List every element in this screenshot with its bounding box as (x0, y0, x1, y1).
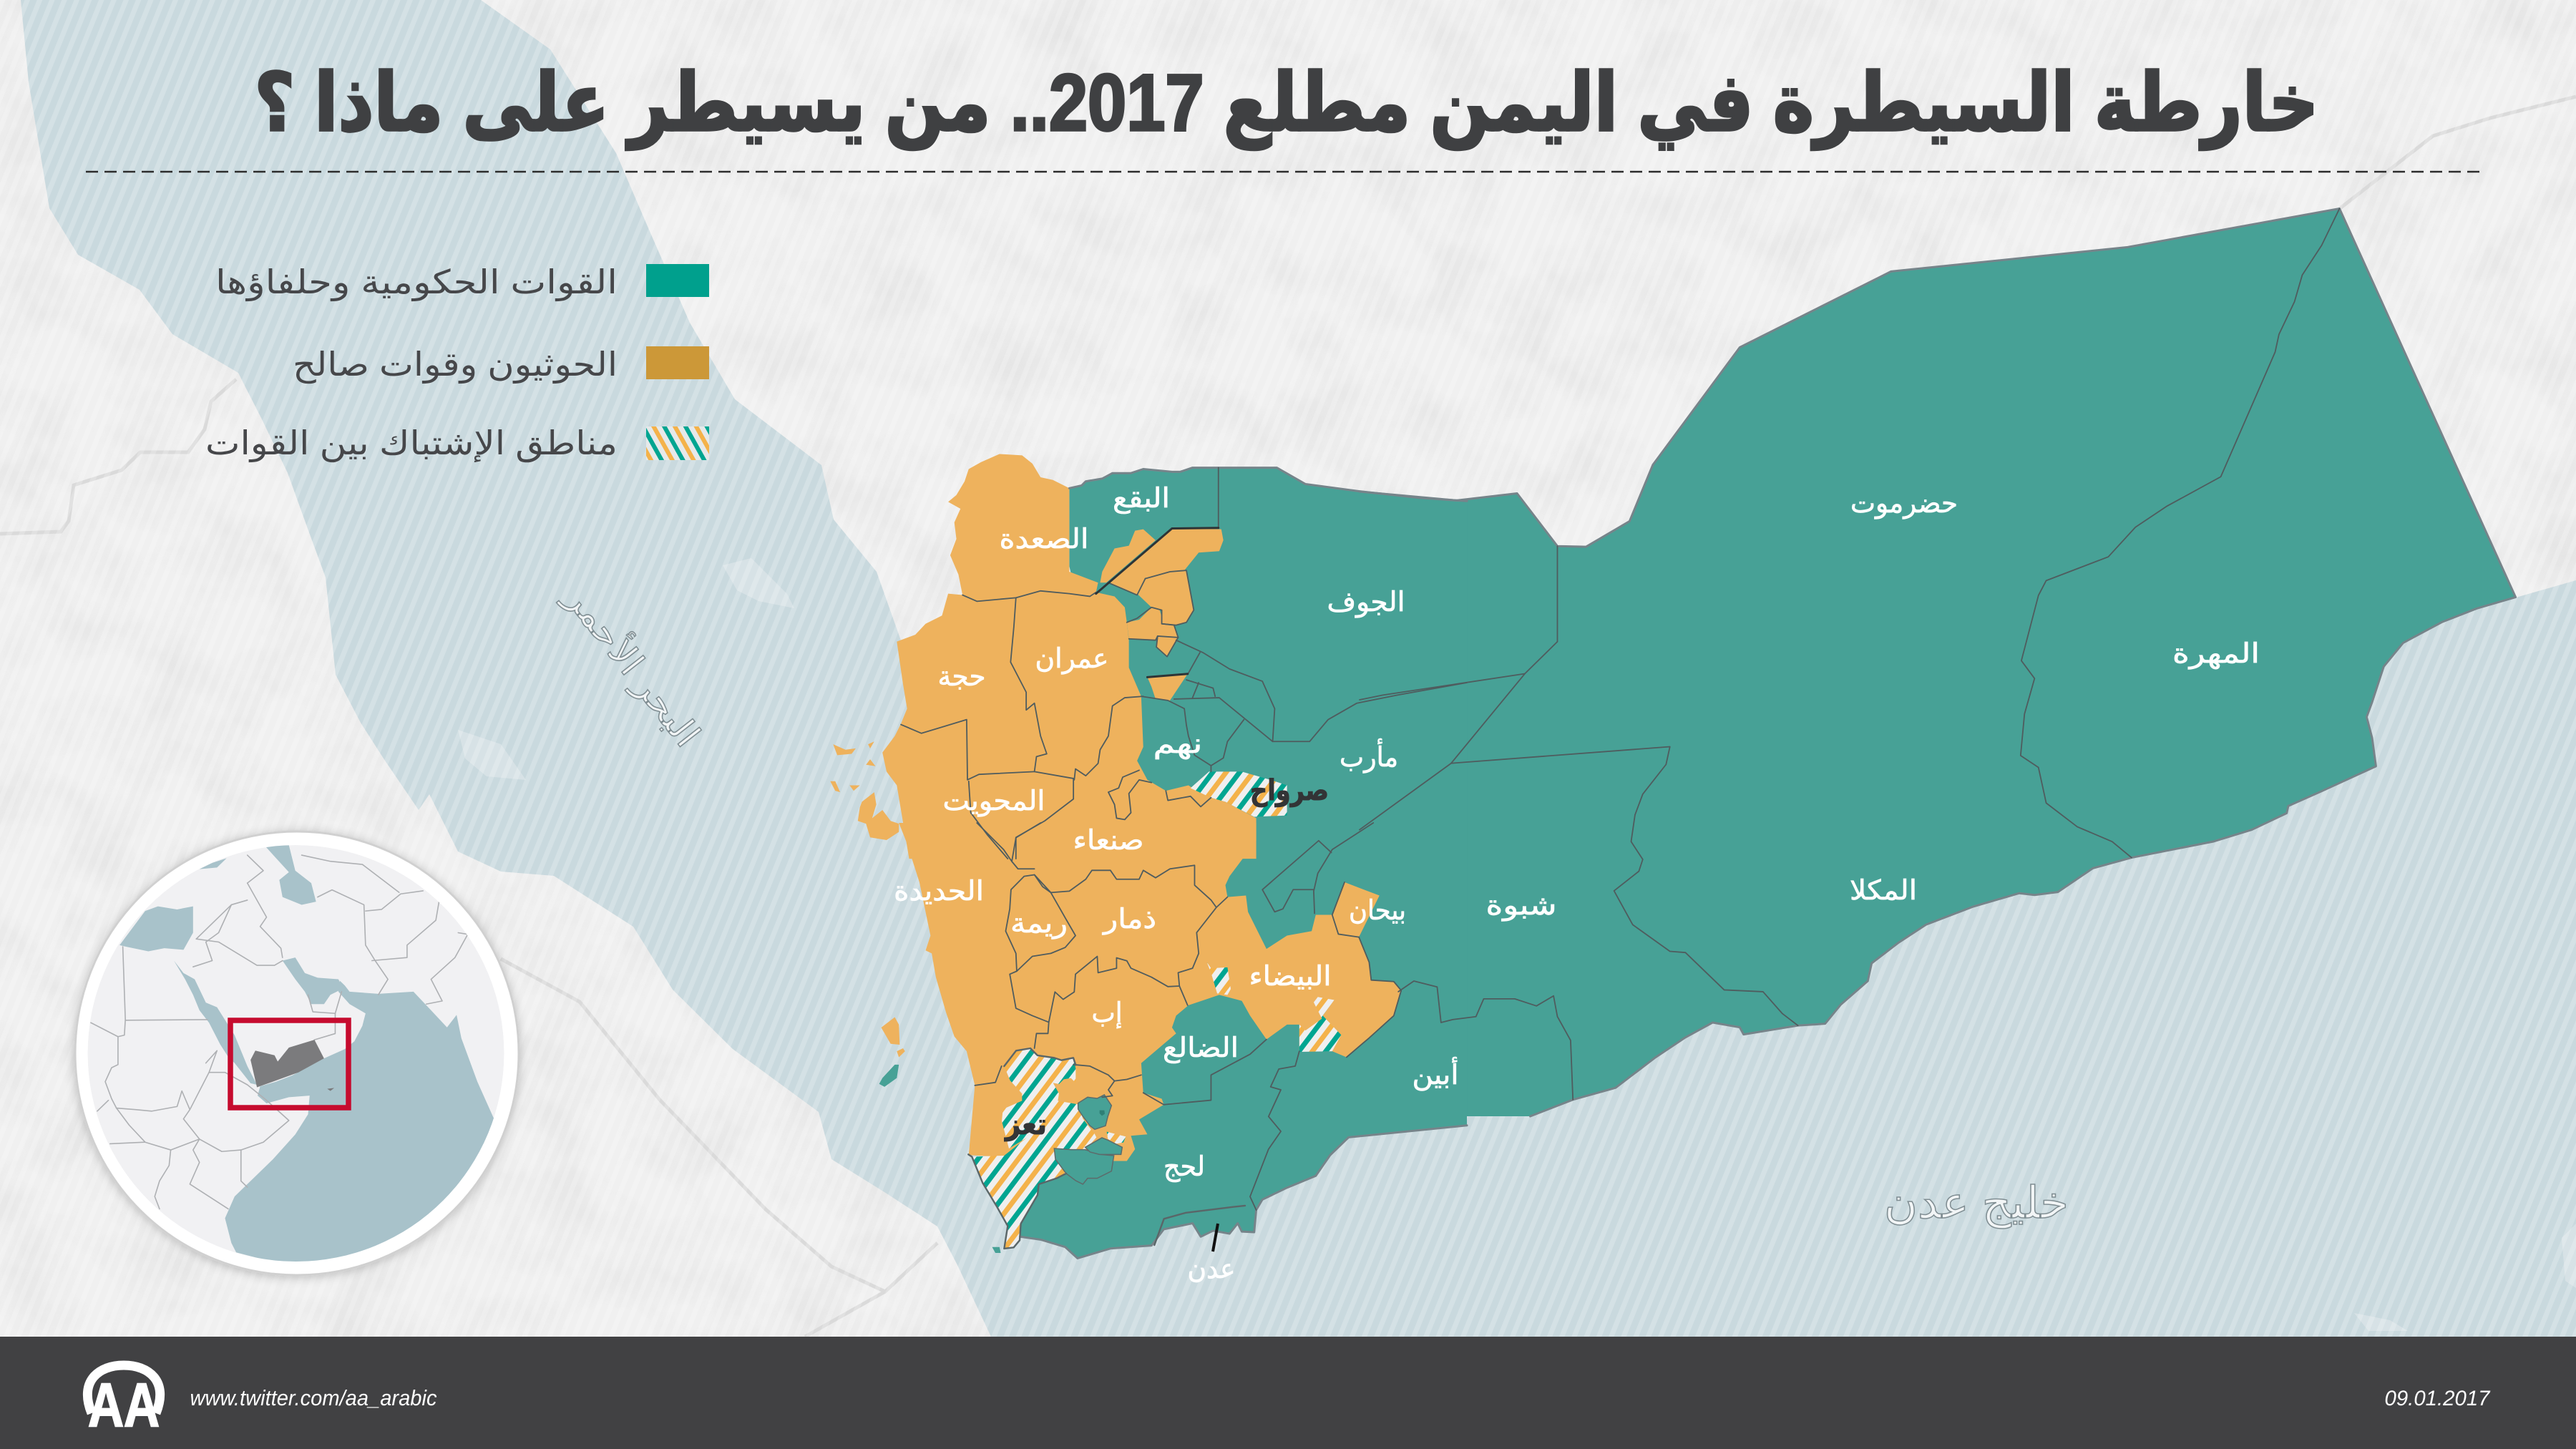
footer bar (0, 1337, 2576, 1449)
governorate labels: البيضاء (1249, 962, 1331, 992)
governorate labels: إب (1092, 998, 1122, 1029)
governorate labels: ريمة (1010, 909, 1068, 939)
footer: date: 09.01.2017 (2384, 1387, 2491, 1410)
governorate labels: الضالع (1163, 1033, 1239, 1064)
legend item: government forces and allies (215, 263, 709, 302)
government pockets and orange bits near taiz (1054, 1095, 1122, 1184)
governorate labels: بيحان (1349, 896, 1406, 926)
governorate labels: الحديدة (894, 877, 984, 907)
governorate labels: ذمار (1102, 904, 1156, 935)
governorate labels: حضرموت (1850, 489, 1958, 519)
conflict zones: sirwah, taiz, al-bayda (972, 771, 1341, 1249)
title: خارطة السيطرة في اليمن مطلع 2017.. من يسيطر على ماذا ؟ (255, 58, 2319, 150)
governorate labels: المحويت (943, 786, 1045, 817)
footer: twitter handle: www.twitter.com/aa_arabic (190, 1385, 437, 1410)
governorate labels: عدن (1188, 1254, 1235, 1284)
houthi and saleh territory (830, 454, 1401, 1161)
governorate labels: نهم (1153, 729, 1202, 760)
label: red sea: البحر الأحمر (556, 575, 709, 755)
governorate labels: عمران (1035, 644, 1109, 675)
governorate labels: الجوف (1327, 587, 1405, 618)
legend item: houthis and saleh forces: الحوثيون وقوات صالح (293, 346, 618, 384)
icon: anadolu agency logo: AA (88, 1371, 160, 1440)
governorate labels: تعز (1004, 1109, 1047, 1141)
governorate labels: صرواح (1250, 775, 1329, 807)
icon: aden pointer line (1213, 1224, 1218, 1252)
governorate labels (894, 484, 2260, 1284)
governorate labels: المكلا (1850, 876, 1917, 906)
inset: red locator box (230, 1020, 348, 1108)
governorate labels: صنعاء (1073, 826, 1143, 856)
yemen map (830, 209, 2516, 1258)
governorate labels: شبوة (1485, 891, 1557, 922)
governorate labels: لحج (1163, 1152, 1205, 1183)
legend item: clash zones: مناطق الإشتباك بين القوات (205, 424, 618, 463)
governorate labels: أبين (1413, 1057, 1458, 1091)
inset: yemen highlighted (250, 1040, 334, 1091)
governorate borders (901, 209, 2339, 1249)
government-held territory (879, 209, 2516, 1258)
governorate labels: المهرة (2172, 639, 2260, 670)
governorate labels: حجة (937, 662, 986, 692)
inset locator map (75, 831, 522, 1275)
legend item: houthis and saleh forces (293, 346, 709, 384)
legend (205, 263, 709, 463)
coastline outline (1020, 209, 2516, 1258)
governorate labels: الصعدة (999, 525, 1089, 555)
governorate labels: مأرب (1340, 738, 1398, 773)
title divider (86, 171, 2486, 172)
governorate labels: البقع (1113, 484, 1170, 514)
label: gulf of aden: خليج عدن (1884, 1179, 2069, 1229)
inset: seas (119, 845, 522, 1268)
legend item: government forces and allies: القوات الحكومية وحلفاؤها (215, 263, 618, 302)
inset: borders (91, 855, 468, 1209)
